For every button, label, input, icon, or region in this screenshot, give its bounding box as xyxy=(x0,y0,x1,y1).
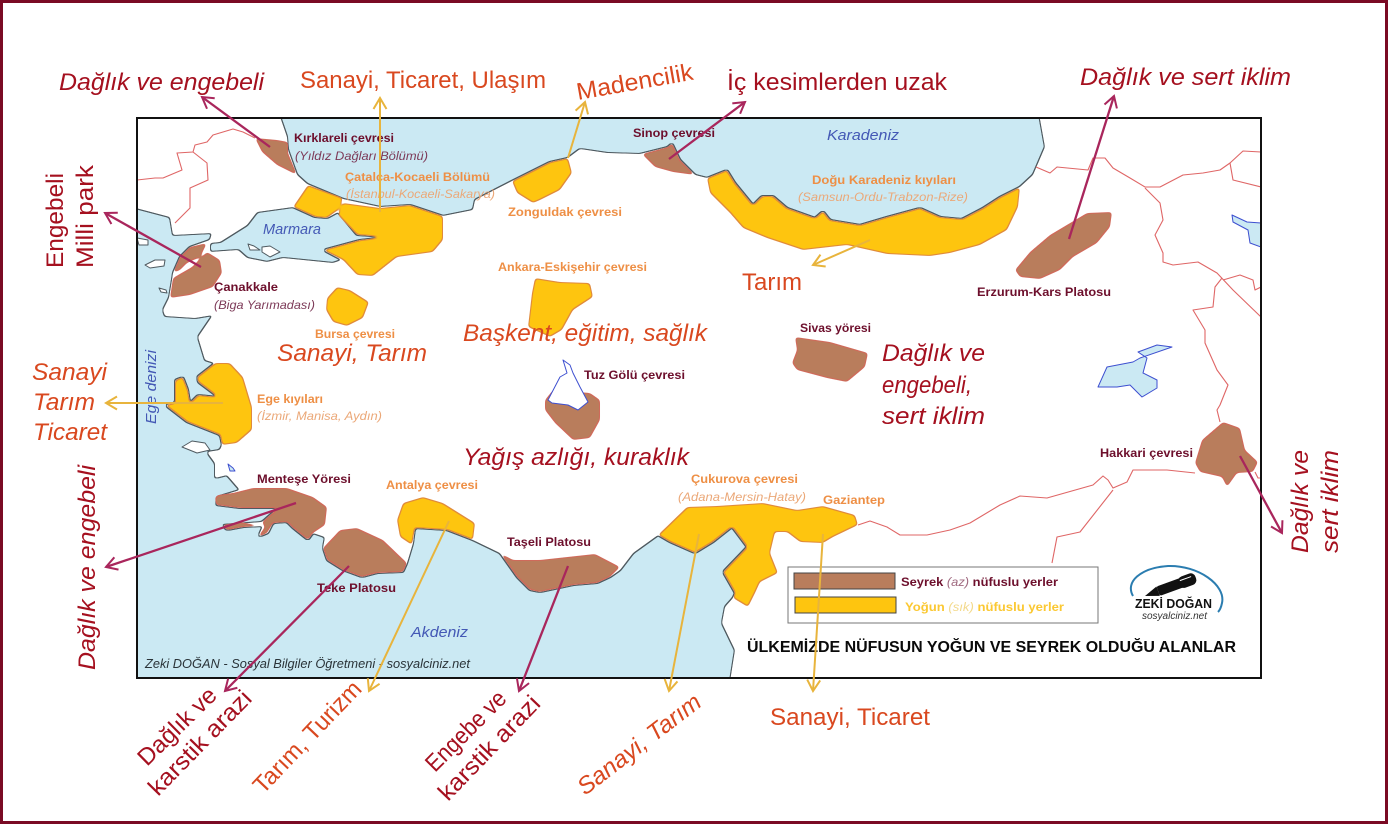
region labels: sparse: Sivas yöresi xyxy=(800,321,871,335)
logo: sosyalciniz.net xyxy=(1142,611,1208,622)
region labels: sparse: Kırklareli çevresi xyxy=(294,131,394,145)
region labels: dense: (İstanbul-Kocaeli-Sakarya) xyxy=(346,187,495,201)
legend xyxy=(788,567,1098,623)
borders: neighbours xyxy=(137,129,1261,563)
annotations: dense area causes: Sanayi xyxy=(32,359,108,386)
region labels: dense: Bursa çevresi xyxy=(315,327,395,341)
region labels: sparse: Menteşe Yöresi xyxy=(257,472,351,486)
dense regions: yellow xyxy=(165,158,1020,607)
annotations: sparse area causes: engebeli, xyxy=(882,372,972,399)
region labels: dense: Antalya çevresi xyxy=(386,478,478,492)
logo: ZEKİ DOĞAN xyxy=(1135,596,1212,611)
region labels: dense: Çukurova çevresi xyxy=(691,472,798,486)
sea names: Karadeniz xyxy=(827,127,900,144)
map of Turkey xyxy=(128,108,1261,688)
region labels: dense: (Samsun-Ordu-Trabzon-Rize) xyxy=(798,190,968,204)
sea names: Akdeniz xyxy=(410,624,469,641)
annotations: sparse area causes: Dağlık ve xyxy=(132,682,223,771)
annotations: dense area causes: Ticaret xyxy=(33,419,108,446)
annotations: sparse area causes: karstik arazi xyxy=(433,690,546,806)
region labels: dense: Doğu Karadeniz kıyıları xyxy=(812,173,956,187)
annotations: dense area causes: Sanayi, Tarım xyxy=(572,688,707,801)
region labels: sparse: (Biga Yarımadası) xyxy=(214,298,315,312)
legend: Yoğun (sık) nüfuslu yerler xyxy=(905,600,1064,614)
sea names: Marmara xyxy=(263,221,321,238)
annotations: dense area causes: Sanayi, Ticaret xyxy=(770,704,930,731)
region labels: sparse: Tuz Gölü çevresi xyxy=(584,368,685,382)
annotations: sparse area causes: sert iklim xyxy=(1317,450,1344,553)
region labels: sparse xyxy=(214,126,1193,595)
region labels: dense: Çatalca-Kocaeli Bölümü xyxy=(345,170,490,184)
annotations: sparse area causes: Yağış azlığı, kuraklık xyxy=(463,444,691,471)
sparse regions: brown xyxy=(170,138,1258,592)
region labels: sparse: Taşeli Platosu xyxy=(507,535,591,549)
arrows: dense causes xyxy=(106,98,870,691)
annotations: sparse area causes: İç kesimlerden uzak xyxy=(727,69,948,96)
islands xyxy=(137,238,280,453)
annotations: sparse area causes: sert iklim xyxy=(882,403,985,430)
annotations: sparse area causes: Dağlık ve xyxy=(1287,450,1314,553)
annotations: sparse area causes: Dağlık ve sert iklim xyxy=(1080,64,1291,91)
region labels: dense: Ankara-Eskişehir çevresi xyxy=(498,260,647,274)
region labels: sparse: Hakkari çevresi xyxy=(1100,446,1193,460)
annotations: sparse area causes: Dağlık ve xyxy=(882,340,985,367)
region labels: sparse: Teke Platosu xyxy=(317,581,396,595)
annotations: dense area causes: Tarım xyxy=(33,389,95,416)
arrows: sparse causes xyxy=(105,96,1282,691)
region labels: sparse: Erzurum-Kars Platosu xyxy=(977,285,1111,299)
logo xyxy=(1131,566,1222,622)
sea names xyxy=(143,127,900,641)
seas xyxy=(128,108,1045,688)
annotations: dense area causes: Tarım, Turizm xyxy=(248,676,367,799)
sea names: Ege denizi xyxy=(143,349,160,424)
annotations: dense area causes xyxy=(32,59,930,801)
annotations: sparse area causes: Milli park xyxy=(72,164,99,268)
legend: Seyrek (az) nüfuslu yerler xyxy=(901,575,1058,589)
map frame xyxy=(137,118,1261,678)
region labels: dense: Ege kıyıları xyxy=(257,392,323,406)
annotations: dense area causes: Başkent, eğitim, sağlık xyxy=(463,320,709,347)
lakes xyxy=(228,214,1260,472)
annotations: sparse area causes: Engebe ve xyxy=(420,685,512,777)
region labels: dense: (İzmir, Manisa, Aydın) xyxy=(257,409,382,423)
map title: ÜLKEMİZDE NÜFUSUN YOĞUN VE SEYREK OLDUĞU ALANLAR xyxy=(747,637,1236,656)
region labels: dense xyxy=(257,170,968,507)
annotations: dense area causes: Madencilik xyxy=(574,59,696,106)
annotations: sparse area causes: Dağlık ve engebeli xyxy=(74,464,101,670)
Tuz Gölü lake xyxy=(548,360,588,410)
annotations: dense area causes: Tarım xyxy=(742,269,802,296)
annotations: dense area causes: Sanayi, Tarım xyxy=(277,340,427,367)
annotations: sparse area causes: Dağlık ve engebeli xyxy=(59,69,265,96)
annotations: dense area causes: Sanayi, Ticaret, Ulaşım xyxy=(300,67,546,94)
annotations: sparse area causes: Engebeli xyxy=(42,173,69,268)
region labels: dense: (Adana-Mersin-Hatay) xyxy=(678,490,806,504)
region labels: dense: Zonguldak çevresi xyxy=(508,205,622,219)
region labels: sparse: Sinop çevresi xyxy=(633,126,715,140)
annotations: sparse area causes: karstik arazi xyxy=(143,685,257,801)
region labels: dense: Gaziantep xyxy=(823,493,885,507)
region labels: sparse: (Yıldız Dağları Bölümü) xyxy=(295,149,428,163)
region labels: sparse: Çanakkale xyxy=(214,280,278,294)
map credit: Zeki DOĞAN - Sosyal Bilgiler Öğretmeni - sosyalciniz.net xyxy=(144,656,471,671)
